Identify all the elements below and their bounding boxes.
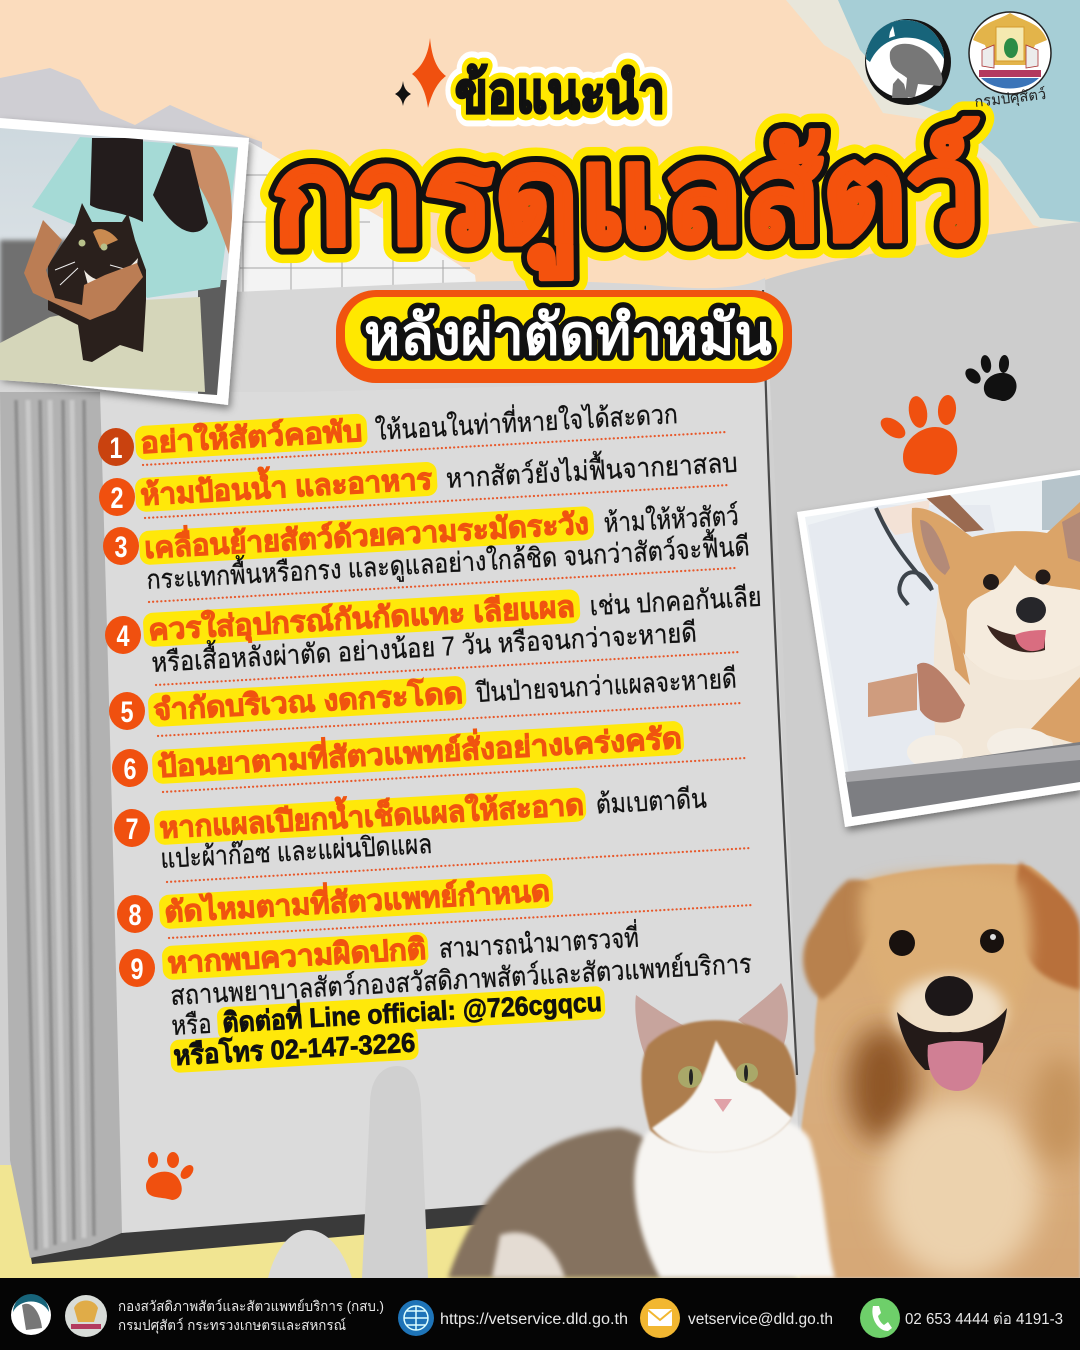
shirt: [32, 137, 238, 298]
cat: [448, 983, 835, 1278]
book: right page: [765, 222, 1080, 1280]
background: teal torn paper: [786, 0, 1080, 240]
cat: eyes: [678, 1066, 702, 1088]
heading: advice: ข้อแนะนำ: [455, 61, 665, 124]
item 1: ให้นอนในท่าที่หายใจได้สะดวก: [374, 395, 678, 446]
corgi head: [912, 502, 1080, 678]
book: upper page behind: [0, 278, 790, 420]
cat: chest: [634, 1113, 835, 1278]
book: page stack: [0, 392, 124, 1258]
item 5: [109, 659, 737, 730]
photo: vet and corgi: [797, 470, 1080, 830]
item 9: หากพบความผิดปกติ: [167, 934, 427, 980]
dog: [798, 862, 1080, 1280]
item 4: 4: [116, 620, 130, 653]
item 8: ตัดไหมตามที่สัตวแพทย์กำหนด: [163, 870, 551, 929]
item 2: หากสัตว์ยังไม่ฟื้นจากยาสลบ: [445, 443, 738, 494]
cat: white face: [652, 1040, 792, 1153]
dog: head: [860, 872, 1031, 1042]
item 4: ควรใส่อุปกรณ์กันกัดแทะ เลียแผล: [147, 589, 576, 648]
item 9: สถานพยาบาลสัตว์กองสวัสดิภาพสัตว์และสัตวแพทย์บริการ: [170, 948, 752, 1011]
item 5: จำกัดบริเวณ งดกระโดด: [152, 675, 464, 727]
item 6: 6: [124, 753, 136, 786]
logo: department seal: [969, 12, 1051, 94]
dog: ears: [803, 879, 878, 1000]
finger: index: [362, 1066, 428, 1278]
dog: nose: [925, 976, 973, 1016]
icon: bottom paw: [146, 1152, 196, 1200]
icon: black paw: [962, 354, 1017, 401]
cat: back: [448, 1128, 800, 1278]
item 3: ห้ามให้หัวสัตว์: [603, 500, 739, 538]
dog: mouth: [897, 1008, 1007, 1070]
stethoscope: [876, 508, 932, 605]
item 9: สามารถนำมาตรวจที่: [438, 919, 640, 964]
book: left page: [100, 380, 805, 1233]
item 3: เคลื่อนย้ายสัตว์ด้วยความระมัดระวัง: [143, 502, 590, 565]
item 9: 9: [130, 953, 144, 986]
dotted divider lines: [143, 432, 753, 938]
background: white grid paper: [0, 130, 478, 300]
item 8: 8: [128, 899, 142, 932]
finger: thumb: [268, 1230, 352, 1278]
logo caption: กรมปศุสัตว์: [974, 86, 1047, 112]
item 2: 2: [110, 482, 124, 515]
footer: organisation name: กรมปศุสัตว์ กระทรวงเกษตรและสหกรณ์: [118, 1317, 346, 1334]
item 2: ห้ามป้อนน้ำ และอาหาร: [139, 457, 433, 512]
item 1: 1: [110, 432, 122, 465]
book: gutter: [763, 290, 797, 1075]
cat: [48, 203, 146, 362]
pants: [0, 297, 205, 392]
dog: eyes: [889, 930, 915, 956]
icon: globe: [398, 1300, 434, 1336]
hand on corgi: [917, 663, 965, 723]
sparkle icons: [395, 38, 446, 108]
item 5: 5: [120, 696, 134, 729]
human arm: [24, 220, 143, 320]
item 7: ต้มเบตาดีน: [595, 783, 707, 820]
table: [845, 742, 1080, 817]
item 5: ปีนป่ายจนกว่าแผลจะหายดี: [475, 663, 737, 708]
footer: logo 1: [11, 1294, 51, 1335]
dog: tongue: [928, 1041, 983, 1091]
footer: organisation name: กองสวัสดิภาพสัตว์และสัตวแพทย์บริการ (กสบ.): [118, 1298, 384, 1314]
book: [0, 222, 1080, 1280]
item 7: แปะผ้าก๊อซ และแผ่นปิดแผล: [160, 829, 433, 874]
item 7: 7: [126, 813, 138, 846]
icon: phone: [860, 1298, 900, 1338]
background: yellow desk: [0, 1165, 1080, 1280]
item 2: [99, 440, 738, 516]
icon: orange paw: [877, 394, 957, 475]
subtitle pill: หลังผ่าตัดทำหมัน: [364, 303, 772, 366]
dog: body: [798, 864, 1080, 1278]
item 9: [119, 919, 752, 1073]
title: การดูแลสัตว์: [271, 118, 981, 282]
corgi body: [934, 591, 1080, 758]
item 7: หากแผลเปียกน้ำเช็ดแผลให้สะอาด: [158, 782, 585, 845]
item 1: [98, 395, 679, 466]
item 3: [103, 494, 750, 596]
title: การดูแลสัตว์: [271, 118, 981, 282]
item 1: อย่าให้สัตว์คอพับ: [139, 414, 363, 460]
heading: advice: ข้อแนะนำ: [455, 61, 665, 124]
item 4: [105, 579, 762, 678]
hair of vet: [925, 495, 984, 532]
corgi paws: [907, 735, 963, 764]
cat: head: [641, 1020, 796, 1151]
item 3: 3: [114, 531, 128, 564]
footer: organisation name: [118, 1298, 384, 1334]
footer: website: https://vetservice.dld.go.th: [440, 1311, 628, 1328]
item 4: หรือเสื้อหลังผ่าตัด อย่างน้อย 7 วัน หรือจนกว่าจะหายดี: [150, 613, 697, 678]
photo: woman holding cat: [0, 118, 250, 410]
hair: [90, 138, 143, 222]
forearm: [868, 673, 917, 717]
raised arm: [175, 143, 232, 257]
logo: vet service division: [865, 19, 951, 105]
item 9: หรือโทร 02-147-3226: [173, 1026, 416, 1071]
footer: logo 2: [65, 1295, 107, 1337]
item 9: ติดต่อที่ Line official: @726cgqcu: [221, 982, 603, 1038]
item 4: เช่น ปกคอกันเลีย: [589, 582, 762, 621]
footer: [0, 1278, 1080, 1350]
subtitle pill: [336, 290, 792, 383]
item 6: ป้อนยาตามที่สัตวแพทย์สั่งอย่างเคร่งครัด: [156, 717, 683, 784]
icon: mail: [640, 1298, 680, 1338]
item 3: กระแทกพื้นหรือกรง และดูแลอย่างใกล้ชิด จนกว่าสัตว์จะฟื้นดี: [145, 526, 750, 596]
background: peach paper: [0, 0, 1080, 300]
item 7: [114, 775, 708, 874]
footer: email: vetservice@dld.go.th: [688, 1311, 833, 1328]
cat: ears: [635, 995, 692, 1065]
coat: [876, 505, 884, 506]
cat: nose: [714, 1099, 732, 1112]
title: การดูแลสัตว์: [271, 118, 981, 282]
book: cover bottom: [22, 1180, 530, 1264]
item 9: หรือ: [171, 1009, 212, 1041]
background: torn grey paper top left: [0, 68, 262, 170]
heading: advice: ข้อแนะนำ: [455, 61, 665, 124]
footer: phone: 02 653 4444 ต่อ 4191-3: [905, 1311, 1063, 1328]
